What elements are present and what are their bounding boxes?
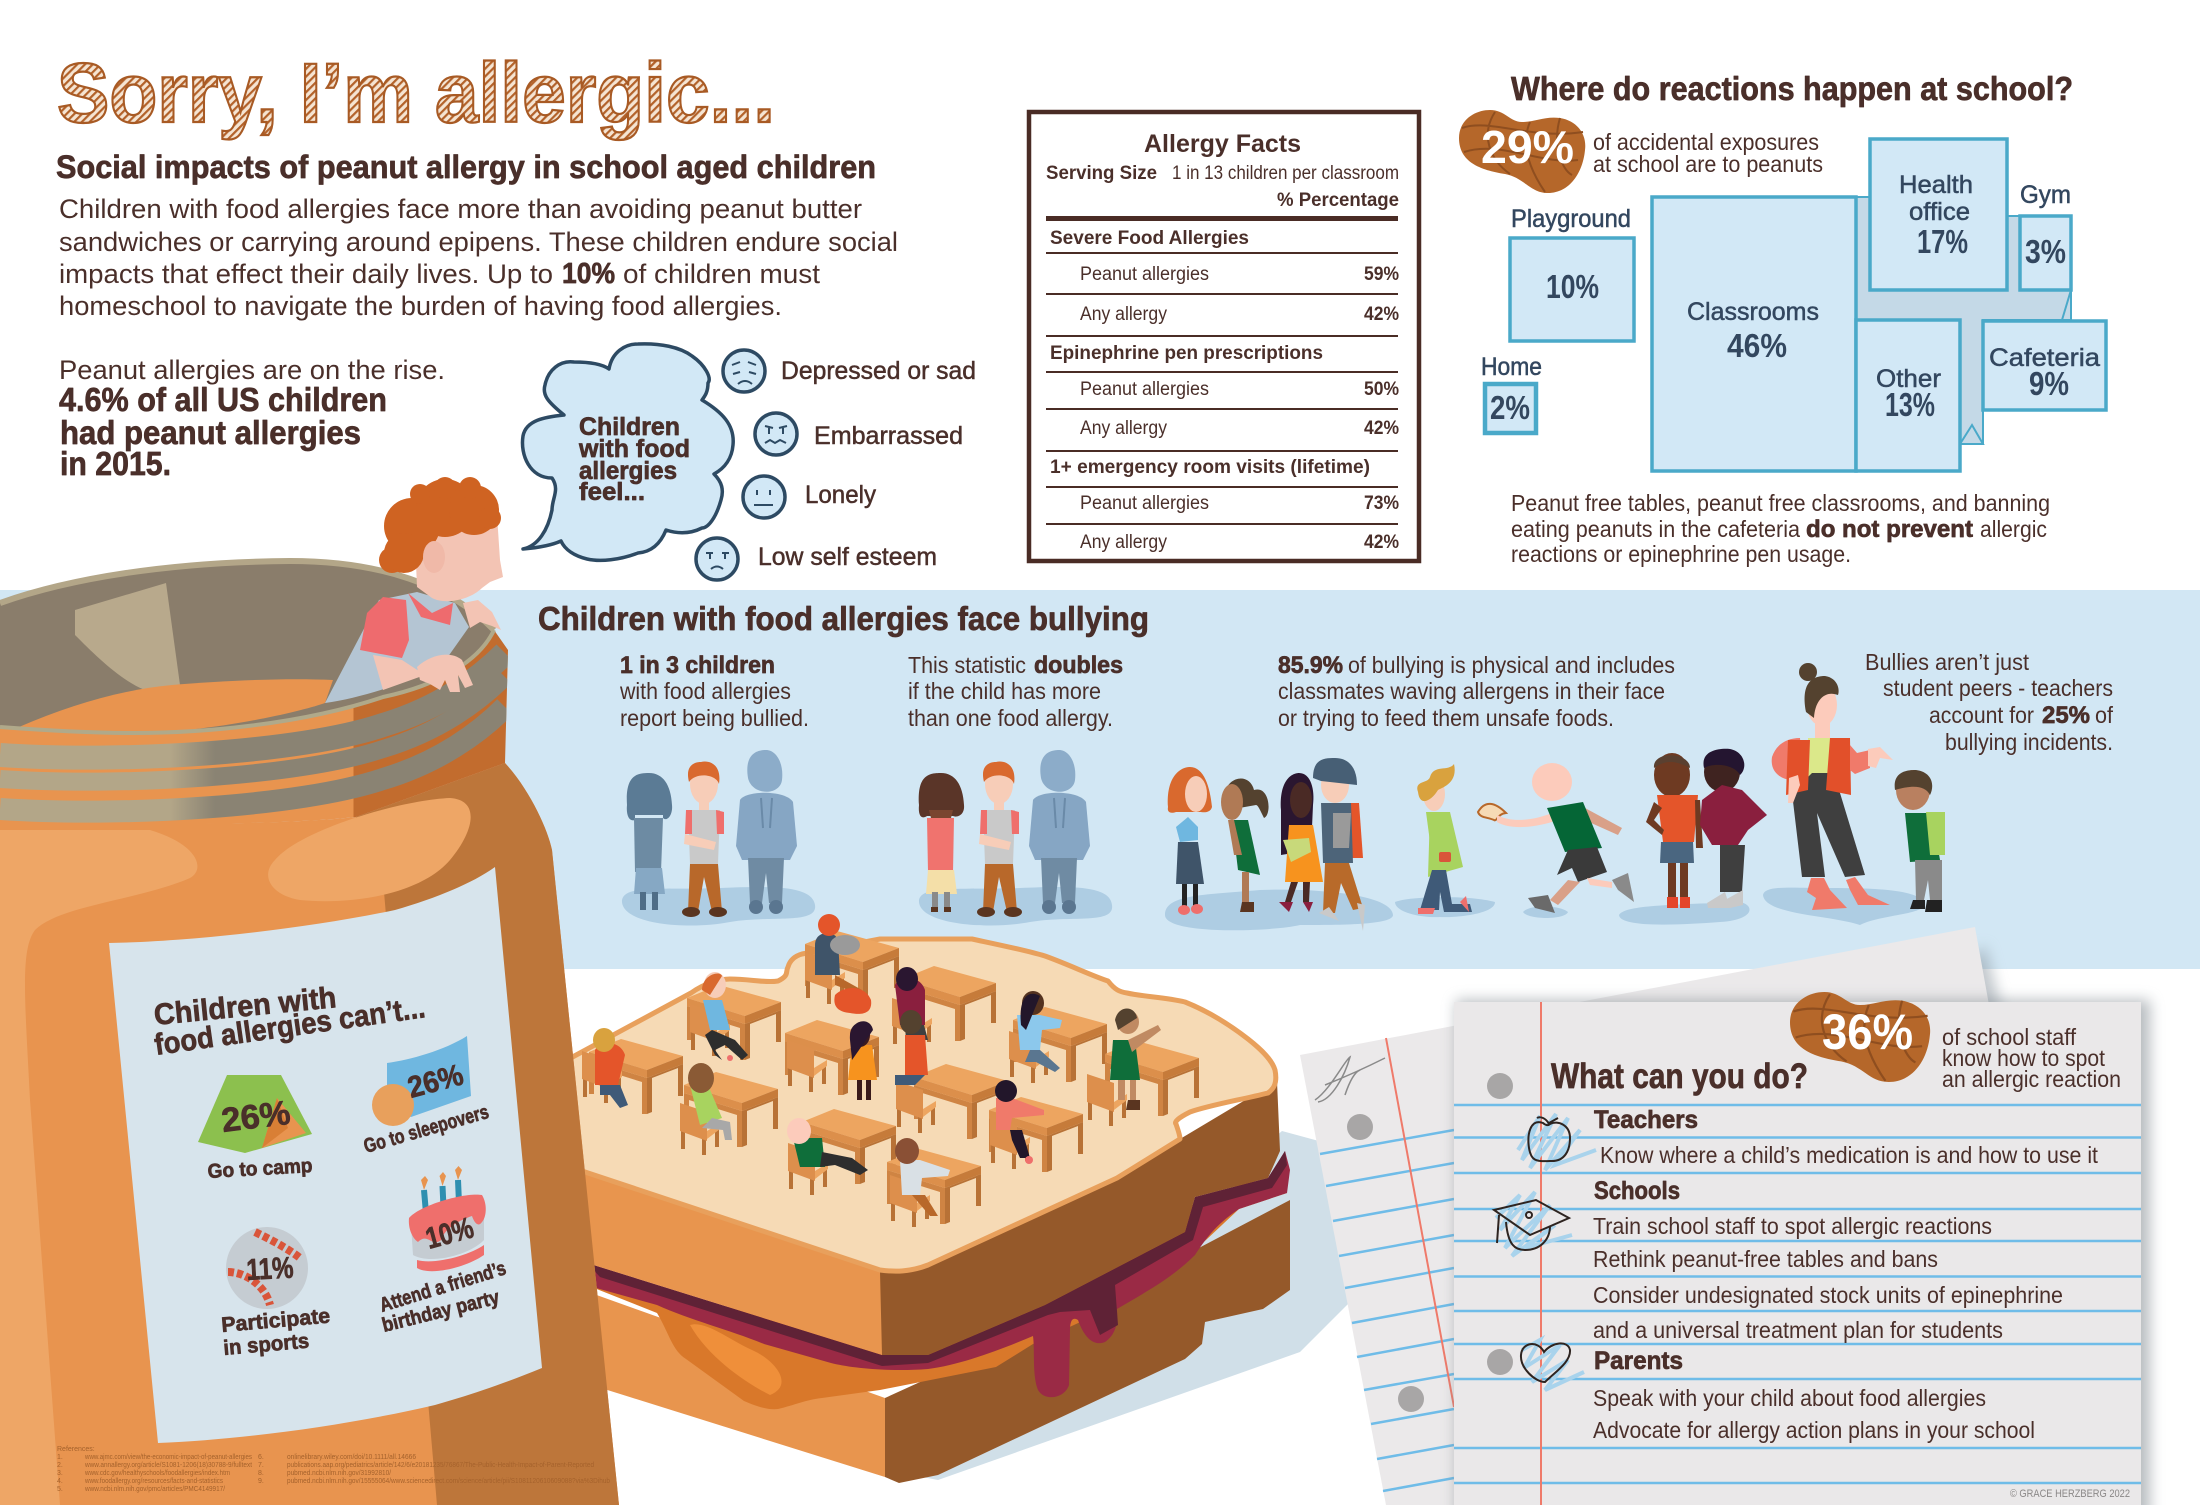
bullying stat: doubles: doubles — [1034, 652, 1123, 679]
references: www.annallergy.org/article/S1081-1206(18)30788-9/fulltext — [84, 1462, 252, 1469]
girl in orange dress — [1279, 773, 1323, 912]
bullying stat: teachers 25%: bullying incidents. — [1945, 729, 2113, 755]
paragraph: peanut free tables: allergic — [1980, 516, 2047, 542]
room: cafeteria — [1983, 321, 2106, 410]
icon: apple — [1518, 1114, 1596, 1170]
heading: bullying: Children with food allergies face bullying — [538, 600, 1149, 637]
stat: sports: in sports — [222, 1330, 310, 1360]
child's hands on rim — [417, 600, 501, 692]
punch holes — [1487, 1073, 1513, 1375]
curly hair — [379, 477, 501, 573]
room: classrooms: Classrooms — [1687, 298, 1819, 326]
bullying stat: 85.9%: 85.9% — [1278, 652, 1343, 679]
illustration: classroom desks and children on the sandwich — [582, 914, 1199, 1227]
illustration: peanut butter jar — [0, 477, 619, 1505]
bullying stat: 1 in 3 — [619, 652, 809, 731]
label: embarrassed: Embarrassed — [814, 422, 963, 450]
panel: allergy facts label: 42% — [1364, 304, 1399, 325]
speech bubble: children with food allergies feel: feel... — [579, 478, 645, 506]
panel: allergy facts label: 42% — [1364, 418, 1399, 439]
section: parents: Parents — [1594, 1347, 1683, 1375]
references: 8. — [258, 1470, 264, 1477]
room: home — [1481, 353, 1542, 433]
references: www.cdc.gov/healthyschools/foodallergies/index.htm — [84, 1470, 230, 1477]
notebook page front — [1454, 1000, 2150, 1505]
references: publications.aap.org/pediatrics/article/142/6/e20181235/76867/The-Public-Health-Impact-of-Parent-Reported — [287, 1462, 594, 1469]
intro paragraph: of children must — [623, 259, 821, 289]
icon: low self esteem face — [696, 538, 738, 580]
sandwich shadow — [885, 1131, 1352, 1480]
background notebook page — [1300, 927, 2004, 1505]
icon: graduation cap — [1494, 1192, 1572, 1256]
illustration: victim child with sandwich bully — [1395, 749, 1767, 925]
bully running — [1497, 763, 1634, 913]
callout: 29% peanut: at school are to peanuts — [1593, 151, 1823, 177]
illustration: group 3 whispering kids — [1165, 758, 1393, 931]
section: parents — [1521, 1340, 2035, 1443]
panel: allergy facts label: Peanut allergies — [1080, 264, 1209, 285]
stat: birthday party: 10% — [422, 1211, 477, 1256]
speech bubble: children with food allergies feel — [522, 344, 733, 560]
panel: allergy facts label: 42% — [1364, 532, 1399, 553]
floor plan chart — [1481, 139, 2106, 471]
paragraph: peanut free tables: do not prevent — [1806, 516, 1973, 543]
room: health office: office — [1909, 198, 1970, 226]
stat: camp — [198, 1075, 313, 1183]
icon: sad face — [723, 350, 765, 392]
bullying stat: 1 in 3: 1 in 3 children — [620, 652, 775, 679]
signature — [1315, 1057, 1385, 1102]
stat: birthday party: Attend a friend’s — [377, 1257, 509, 1317]
paragraph: peanut free tables: Peanut free tables, peanut free classrooms, and banning — [1511, 490, 2050, 516]
copyright: © GRACE HERZBERG 2022 — [2010, 1488, 2130, 1500]
bullying stat: teachers 25%: account for — [1929, 702, 2034, 728]
panel: allergy facts label: 50% — [1364, 379, 1399, 400]
speech bubble: children with food allergies feel: with food — [578, 435, 690, 463]
section: teachers: Know where a child’s medication is and how to use it — [1600, 1142, 2099, 1168]
sandwich projectile — [1478, 804, 1506, 820]
room: health office: 17% — [1917, 223, 1968, 260]
room: gym — [2020, 181, 2071, 290]
room: other: 13% — [1885, 386, 1935, 423]
top desk and child — [805, 914, 899, 1006]
stat: camp: 26% — [219, 1094, 292, 1140]
heading: what can you do: What can you do? — [1551, 1057, 1808, 1096]
panel: allergy facts label: Serving Size — [1046, 163, 1157, 184]
references — [57, 1446, 610, 1493]
callout: 36% peanut: 36% — [1822, 1004, 1913, 1060]
section: schools: Schools — [1594, 1177, 1680, 1205]
bullying stat: 85.9%: classmates waving allergens in their face — [1278, 678, 1665, 704]
section: teachers: Teachers — [1594, 1106, 1698, 1134]
desks row 2 — [687, 972, 781, 1061]
stat: sports: 11% — [246, 1252, 294, 1287]
icon: lonely face — [743, 476, 785, 518]
intro paragraph: impacts that effect their daily lives. Up to — [59, 259, 553, 289]
references: pubmed.ncbi.nlm.nih.gov/31992810/ — [287, 1470, 391, 1477]
room: playground: Playground — [1511, 205, 1631, 233]
paragraph: peanut free tables: reactions or epinephrine pen usage. — [1511, 541, 1851, 567]
panel: allergy facts label: Peanut allergies — [1080, 493, 1209, 514]
callout: 29% peanut: 29% — [1481, 121, 1574, 173]
stat: sports: Participate — [220, 1305, 331, 1337]
door triangles — [1960, 290, 2071, 444]
peanut allergy statistic text — [59, 355, 445, 482]
bullying stat: 85.9%: of bullying is physical and includes — [1348, 652, 1675, 678]
speech bubble: children with food allergies feel: allergies — [579, 457, 677, 485]
label: lonely: Lonely — [805, 481, 876, 509]
illustration: group 2 bystanders — [919, 750, 1112, 926]
references: 9. — [258, 1478, 264, 1485]
panel: allergy facts label: 1 in 13 children per classroom — [1172, 163, 1399, 184]
room: other — [1856, 320, 1960, 471]
blue band background — [0, 590, 2200, 969]
girl with red hair — [1168, 767, 1212, 915]
peanut allergy statistic text: 4.6% of all US children — [59, 381, 387, 418]
section: parents: Speak with your child about food allergies — [1593, 1385, 1986, 1411]
references: onlinelibrary.wiley.com/doi/10.1111/all.14666 — [287, 1454, 416, 1461]
jar label — [109, 867, 542, 1443]
references: 1. — [57, 1454, 63, 1461]
panel: allergy facts label: % Percentage — [1277, 190, 1399, 211]
victim boy — [1417, 764, 1472, 914]
references: www.ncbi.nlm.nih.gov/pmc/articles/PMC4149917/ — [84, 1486, 225, 1493]
callout: 36% peanut — [1790, 992, 2121, 1092]
callout: 36% peanut: an allergic reaction — [1942, 1066, 2121, 1092]
icon: heart — [1521, 1340, 1584, 1390]
jar left highlight — [0, 830, 197, 1505]
references: 6. — [258, 1454, 264, 1461]
stat: birthday party — [377, 1166, 509, 1337]
panel: allergy facts label: Peanut allergies — [1080, 379, 1209, 400]
intro paragraph — [59, 194, 898, 321]
intro paragraph: homeschool to navigate the burden of having food allergies. — [59, 291, 782, 321]
panel: allergy facts label: 59% — [1364, 264, 1399, 285]
jar label: food allergies can’t... — [152, 991, 427, 1062]
jelly shadow — [587, 1151, 1287, 1366]
room: home: 2% — [1490, 389, 1530, 426]
jar label: Children with — [152, 981, 338, 1032]
top slice surface — [567, 939, 1276, 1271]
room: home: Home — [1481, 353, 1542, 381]
subtitle: Social impacts of peanut allergy in school aged children — [56, 149, 876, 185]
room: classrooms: 46% — [1727, 327, 1787, 364]
callout: 36% peanut: know how to spot — [1942, 1045, 2106, 1071]
threaded neck — [0, 620, 510, 830]
panel: allergy facts label: 1+ emergency room visits (lifetime) — [1050, 457, 1370, 478]
section: schools: Consider undesignated stock units of epinephrine — [1593, 1282, 2063, 1308]
section: schools: Rethink peanut-free tables and bans — [1593, 1246, 1938, 1272]
room: cafeteria: Cafeteria — [1989, 344, 2100, 372]
peanut allergy statistic text: Peanut allergies are on the rise. — [59, 355, 445, 385]
icon: embarrassed face — [755, 413, 797, 455]
paragraph: peanut free tables: eating peanuts in the cafeteria — [1511, 516, 1800, 542]
references: www.foodallergy.org/resources/facts-and-statistics — [84, 1478, 223, 1485]
references: References: — [57, 1446, 95, 1453]
bullying stat: teachers 25%: of — [2095, 702, 2114, 728]
room: gym: Gym — [2020, 181, 2071, 209]
references: 4. — [57, 1478, 63, 1485]
stat: birthday party: birthday party — [380, 1286, 502, 1337]
top slice sides — [579, 1170, 882, 1355]
bullying stat: teachers 25%: 25% — [2042, 702, 2090, 729]
paragraph: peanut free tables — [1511, 490, 2050, 567]
peanut butter inside — [19, 679, 333, 733]
label: depressed or sad: Depressed or sad — [781, 357, 976, 385]
room: cafeteria: 9% — [2029, 365, 2069, 402]
references: 5. — [57, 1486, 63, 1493]
panel: allergy facts label: Allergy Facts — [1144, 130, 1301, 158]
section: schools — [1494, 1177, 2063, 1343]
stat: sports — [220, 1227, 331, 1360]
illustration: teacher and child — [1763, 663, 1945, 925]
heading: where do reactions happen: Where do reactions happen at school? — [1511, 70, 2073, 107]
callout: 29% peanut — [1459, 110, 1823, 193]
bullying stat: 1 in 3: with food allergies — [619, 678, 791, 704]
upper desk with maroon child — [892, 966, 996, 1050]
callout: 36% peanut: of school staff — [1942, 1024, 2077, 1050]
bullying stat: 85.9%: or trying to feed them unsafe foods. — [1278, 705, 1614, 731]
section: schools: Train school staff to spot allergic reactions — [1593, 1213, 1992, 1239]
peanut butter layer — [589, 1180, 1287, 1409]
section: teachers — [1518, 1106, 2099, 1170]
references: 7. — [258, 1462, 264, 1469]
bullying stat: teachers 25%: student peers - teachers — [1883, 675, 2113, 701]
room: classrooms — [1652, 197, 1856, 471]
jar body — [0, 763, 619, 1505]
intro paragraph: Children with food allergies face more than avoiding peanut butter — [59, 194, 862, 224]
bullying stat: doubles: if the child has more — [908, 678, 1101, 704]
stat: sleepovers: Go to sleepovers — [361, 1101, 491, 1158]
boy in hat — [1313, 758, 1365, 931]
jar right shade — [356, 763, 619, 1505]
room: playground — [1510, 205, 1634, 341]
label: low self esteem: Low self esteem — [758, 543, 937, 571]
inner highlight — [75, 583, 180, 690]
jelly layer — [587, 1151, 1290, 1397]
emotions list with faces — [696, 350, 976, 580]
bullying stat: 1 in 3: report being bullied. — [620, 705, 809, 731]
panel: allergy facts label: 73% — [1364, 493, 1399, 514]
bullying stat: 85.9% — [1278, 652, 1675, 731]
section: parents: Advocate for allergy action plans in your school — [1593, 1417, 2035, 1443]
room: health office: Health — [1899, 171, 1973, 199]
room: other: Other — [1876, 365, 1941, 393]
intro paragraph: sandwiches or carrying around epipens. These children endure social — [59, 227, 898, 257]
title: Sorry, I’m allergic... — [57, 46, 775, 140]
child peeking out of jar — [325, 477, 503, 703]
illustration: group 1 bystanders — [622, 750, 815, 926]
shoulder highlight — [268, 798, 471, 901]
bullying stat: teachers 25% — [1865, 649, 2114, 755]
bullying stat: doubles: than one food allergy. — [908, 705, 1113, 731]
jar rim — [0, 630, 494, 733]
stat: sleepovers: 26% — [404, 1058, 467, 1105]
panel: allergy facts label — [1029, 112, 1419, 561]
girl in green dress — [1221, 779, 1269, 912]
red backpack — [834, 988, 871, 1014]
peanut allergy statistic text: had peanut allergies — [60, 414, 361, 451]
panel: allergy facts label: Any allergy — [1080, 532, 1167, 553]
callout: 29% peanut: of accidental exposures — [1593, 129, 1819, 155]
references: 3. — [57, 1470, 63, 1477]
panel: allergy facts label: Epinephrine pen prescriptions — [1050, 343, 1323, 364]
panel: allergy facts label: Severe Food Allergies — [1050, 228, 1249, 249]
bottom slice — [591, 1293, 885, 1477]
bullying stat: teachers 25%: Bullies aren’t just — [1865, 649, 2030, 675]
room: health office — [1870, 139, 2007, 290]
peanut allergy statistic text: in 2015. — [60, 445, 171, 482]
bullying stat: doubles: This statistic — [908, 652, 1026, 678]
two boys — [1619, 749, 1767, 925]
illustration: peanut butter and jelly sandwich — [567, 939, 1290, 1483]
references: 2. — [57, 1462, 63, 1469]
bullying stat: doubles — [908, 652, 1123, 731]
speech bubble: children with food allergies feel: Children — [579, 413, 680, 441]
references: pubmed.ncbi.nlm.nih.gov/15555064/www.sciencedirect.com/science/article/pii/S1081120610609088?via%3Dihub — [287, 1478, 610, 1485]
stat: camp: Go to camp — [207, 1155, 313, 1183]
room: playground: 10% — [1546, 268, 1599, 305]
references: www.ajmc.com/view/the-economic-impact-of-peanut-allergies — [84, 1454, 252, 1461]
shadows — [1395, 897, 1568, 918]
jar interior — [0, 561, 494, 733]
section: schools: and a universal treatment plan for students — [1593, 1317, 2003, 1343]
stat: sleepovers — [361, 1036, 491, 1158]
intro paragraph: 10% — [562, 258, 615, 290]
girl in orange dress — [848, 1021, 877, 1100]
panel: allergy facts label: Any allergy — [1080, 304, 1167, 325]
hallway — [1856, 197, 2071, 444]
room: gym: 3% — [2025, 233, 2066, 270]
panel: allergy facts label: Any allergy — [1080, 418, 1167, 439]
